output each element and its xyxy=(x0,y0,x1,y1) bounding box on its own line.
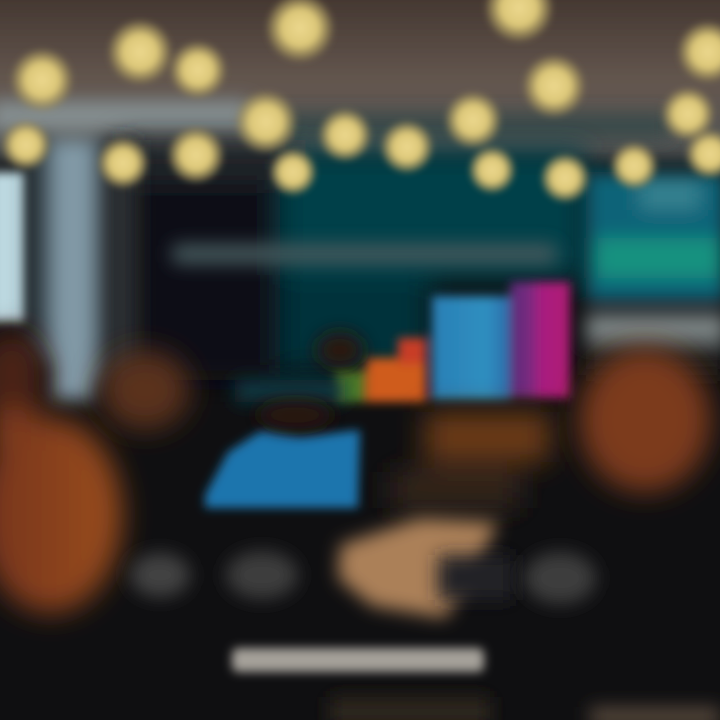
audience head: left foreground xyxy=(0,331,122,613)
wall and column xyxy=(28,140,138,400)
caption text band xyxy=(232,648,484,672)
bar: blue xyxy=(432,296,510,400)
string lights xyxy=(0,0,720,204)
ceiling beam xyxy=(0,100,670,138)
bar: orange xyxy=(366,358,426,402)
ceiling xyxy=(0,0,720,160)
bar: small green xyxy=(335,370,365,402)
right side screen xyxy=(586,172,720,375)
bar chart on main screen xyxy=(335,282,570,402)
desk: warm brown surface xyxy=(100,350,550,508)
bar: magenta xyxy=(510,282,570,398)
audience head: centre dark xyxy=(257,332,364,429)
small blue strip under main screen xyxy=(235,380,345,402)
main screen: dark and teal backdrop xyxy=(120,140,585,380)
bottom warm strip xyxy=(330,697,720,720)
audience head: right foreground xyxy=(579,348,711,492)
laptop keyboard shadow xyxy=(438,555,513,600)
window on the left xyxy=(0,172,26,322)
bar: red tip xyxy=(398,338,426,364)
laptop screen: blue chart xyxy=(205,430,360,508)
paper on the table xyxy=(338,518,498,618)
screen headline text band xyxy=(172,244,557,264)
audience seat icons: grey blurred circles xyxy=(130,551,596,604)
